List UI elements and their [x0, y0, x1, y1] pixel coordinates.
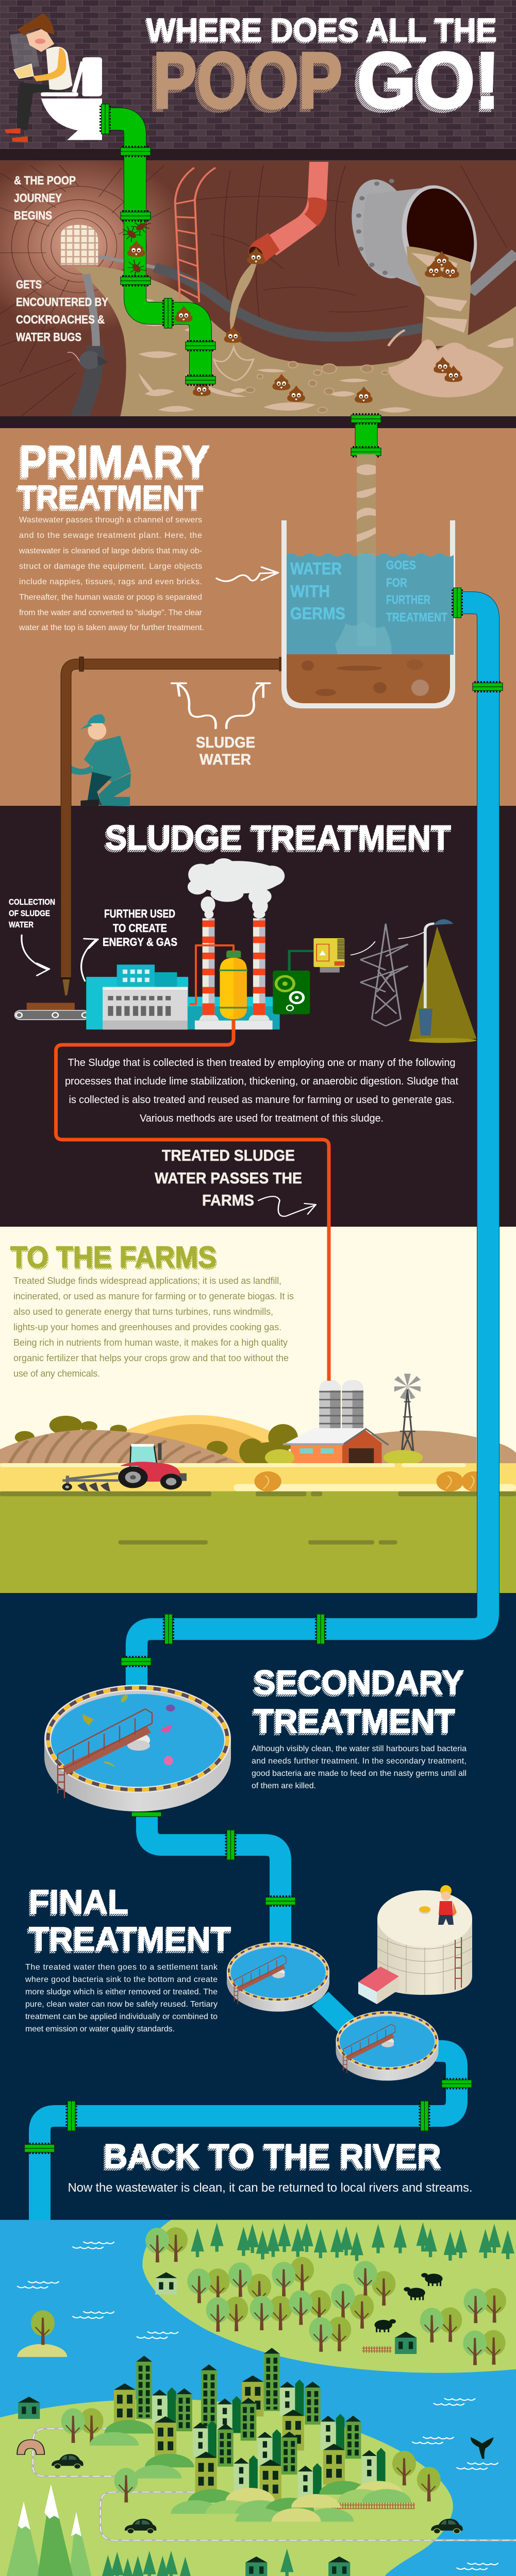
cockroaches and poop in pipe — [119, 216, 193, 322]
tank caption: goes for further treatment — [386, 558, 447, 624]
sewage waterfall — [406, 246, 471, 346]
heading: final treatment: FINAL — [29, 1883, 128, 1921]
chimneys — [195, 918, 273, 1029]
ground — [0, 1463, 516, 1593]
tank caption: water with germs: WATER — [290, 559, 342, 578]
caption: further used to create energy and gas: FURTHER USED — [104, 907, 175, 920]
windmill — [394, 1374, 421, 1454]
north bank — [142, 2220, 516, 2373]
yellow gas tank — [219, 951, 247, 1019]
front bushes — [265, 1449, 423, 1466]
caption: treated sludge water passes the farms: TREATED SLUDGE — [162, 1146, 295, 1164]
south bank — [0, 2399, 453, 2576]
cockroaches caption: COCKROACHES & — [16, 313, 105, 326]
caption: treated sludge water passes the farms: FARMS — [202, 1191, 254, 1209]
farms body text: use of any chemicals. — [13, 1368, 100, 1379]
heading: primary treatment: TREATMENT — [16, 481, 203, 518]
farms body text: also used to generate energy that turns turbines, runs windmills, — [13, 1307, 273, 1317]
settlement tank two — [336, 2011, 439, 2081]
tunnel grate window — [61, 225, 98, 265]
heading: final treatment: TREATMENT — [29, 1920, 231, 1958]
man on toilet with tablet — [5, 13, 102, 142]
power pylon — [351, 924, 425, 1026]
connecting pipe: green toilet outlet — [101, 104, 215, 385]
pine forest — [102, 2223, 514, 2576]
final body text — [25, 1963, 218, 2033]
farms body text: Treated Sludge finds widespread applications; it is used as landfill, — [13, 1276, 281, 1286]
title word: poop: POOP — [153, 36, 342, 125]
primary body text: struct or damage the equipment. Large objects — [19, 562, 202, 571]
title word: poop: POOP — [148, 40, 340, 128]
secondary body text: Although visibly clean, the water still harbours bad bacteria — [252, 1744, 467, 1753]
final body text: pure, clean water can now be safely reused. Tertiary — [25, 2000, 218, 2009]
farms body text: incinerated, or used as manure for farming or to generate biogas. It is — [13, 1291, 294, 1301]
tractor and plough — [62, 1443, 187, 1491]
journey caption — [14, 174, 76, 222]
grey outfall pipe — [343, 175, 485, 293]
title line: where does all the: WHERE DOES ALL THE — [146, 11, 497, 48]
heading: secondary treatment: SECONDARY — [252, 1665, 463, 1703]
tank caption: goes for further treatment: FOR — [386, 576, 407, 590]
back hills and bushes — [15, 1415, 516, 1466]
caption: further used to create energy and gas: ENERGY & GAS — [103, 936, 177, 948]
farms body text — [13, 1276, 294, 1379]
journey caption: JOURNEY — [14, 191, 62, 205]
heading: secondary treatment: TREATMENT — [254, 1702, 455, 1740]
heading: secondary treatment: SECONDARY — [254, 1663, 464, 1701]
primary body text: and to the sewage treatment plant. Here, the — [19, 531, 202, 540]
settling tank with water and sludge — [281, 520, 455, 708]
arrow: energy — [81, 939, 98, 981]
title line: where does all the: WHERE DOES ALL THE — [145, 13, 496, 50]
sludge body text — [65, 1057, 458, 1124]
arrow: collection — [22, 935, 49, 975]
primary body text — [19, 516, 204, 632]
cockroaches caption: WATER BUGS — [16, 330, 81, 344]
island with tree — [17, 2310, 67, 2357]
heading: secondary treatment: TREATMENT — [252, 1704, 454, 1742]
final body text: where good bacteria sink to the bottom and create — [25, 1975, 218, 1984]
round trees — [61, 2227, 506, 2502]
mountains — [3, 2484, 95, 2576]
fences — [331, 2346, 415, 2509]
settlement tank one — [227, 1942, 329, 2012]
tank caption: water with germs: WITH — [290, 582, 330, 601]
primary body text: Thereafter, the human waste or poop is separated — [19, 593, 202, 602]
farms body text: lights-up your homes and greenhouses and provides cooking gas. — [13, 1322, 281, 1332]
houses — [18, 2272, 417, 2576]
ladder — [175, 167, 215, 302]
arrow: to tank — [217, 567, 278, 581]
title word: go!: GO! — [357, 36, 500, 125]
control panel — [313, 938, 344, 973]
heading: primary treatment — [16, 436, 210, 518]
orange treated sludge line — [56, 945, 329, 1381]
heading: sludge treatment: SLUDGE TREATMENT — [104, 820, 451, 859]
sludge water caption: WATER — [199, 751, 251, 768]
conveyor — [15, 979, 89, 1020]
barn — [283, 1428, 388, 1463]
green gear box — [273, 951, 313, 1014]
secondary body text — [252, 1744, 467, 1790]
road bridge over water — [33, 2429, 516, 2540]
germs in tank — [82, 1693, 175, 1768]
primary body text: water at the top is taken away for further treatment. — [19, 623, 204, 632]
caption: collection of sludge water — [9, 898, 55, 929]
heading: primary treatment: TREATMENT — [18, 479, 203, 516]
heading: sludge treatment: SLUDGE TREATMENT — [105, 818, 451, 857]
tank caption: water with germs — [290, 559, 345, 623]
secondary body text: and needs further treatment. In the secondary treatment, — [252, 1757, 467, 1766]
cockroaches caption: ENCOUNTERED BY — [16, 295, 108, 309]
sludge water caption — [196, 734, 255, 768]
final body text: treatment can be applied individually or combined to — [25, 2012, 218, 2021]
panel: primary treatment — [0, 428, 516, 806]
connecting pipe: green into primary tank — [351, 414, 381, 456]
panel: navy treatment section — [0, 1593, 516, 2221]
grey conduit — [99, 257, 155, 267]
journey caption: BEGINS — [14, 209, 52, 222]
tank caption: water with germs: GERMS — [290, 604, 345, 623]
arrows: sludge water — [172, 683, 270, 728]
hay bales — [254, 1471, 486, 1492]
sludge body text: The Sludge that is collected is then treated by employing one or many of the following — [68, 1057, 456, 1069]
silos — [319, 1380, 363, 1429]
heading: primary treatment: PRIMARY — [18, 438, 209, 489]
sewage floor — [74, 266, 516, 417]
final body text: meet emission or water quality standards. — [25, 2025, 175, 2033]
caption: further used to create energy and gas — [103, 907, 177, 948]
sludge body text: processes that include lime stabilization, thickening, or anaerobic digestion. Sludge that — [65, 1076, 458, 1087]
primary body text: from the water and converted to “sludge”. The clear — [19, 608, 203, 617]
toilet — [41, 57, 102, 140]
sludge water caption: SLUDGE — [196, 734, 255, 751]
secondary body text: of them are killed. — [252, 1782, 316, 1790]
secondary body text: good bacteria are made to feed on the nasty germs until all — [252, 1769, 467, 1778]
sludge body text: Various methods are used for treatment of this sludge. — [140, 1113, 384, 1124]
panel: river and town map — [0, 2220, 516, 2576]
panel: to the farms — [0, 1227, 516, 1593]
panel: brick wall header — [0, 0, 516, 160]
primary body text: Wastewater passes through a channel of sewers — [19, 516, 202, 524]
salmon drain pipe — [246, 162, 328, 264]
engineer with hard hat — [438, 1885, 457, 1925]
treated sludge arrow — [258, 1196, 316, 1216]
title word: go!: GO! — [353, 40, 498, 128]
river body text: Now the wastewater is clean, it can be returned to local rivers and streams. — [68, 2181, 472, 2195]
brown sludge pipe — [60, 657, 281, 979]
splash — [388, 340, 504, 397]
tunnel — [17, 2439, 44, 2454]
blue clean water pipes — [25, 588, 503, 2220]
caption: collection of sludge water: WATER — [9, 921, 34, 929]
heading: back to the river: BACK TO THE RIVER — [102, 2139, 441, 2178]
tank caption: goes for further treatment: TREATMENT — [386, 611, 447, 624]
green hills around town — [90, 2420, 411, 2576]
heading: primary treatment: PRIMARY — [19, 436, 210, 487]
farms body text: organic fertilizer that helps your crops grow and that too without the — [13, 1353, 289, 1363]
maintenance worker kneeling — [72, 715, 131, 806]
secondary aeration tank — [44, 1685, 231, 1817]
sewage drip from salmon pipe — [230, 263, 257, 335]
heading: to the farms: TO THE FARMS — [10, 1241, 217, 1274]
panel: underground sewer — [0, 160, 516, 428]
factory building — [86, 964, 280, 1029]
plowed hill — [0, 1430, 240, 1463]
whale tail — [471, 2437, 494, 2459]
sewage stream into tank — [357, 454, 376, 554]
cockroaches caption: GETS — [16, 278, 42, 291]
farms body text: Being rich in nutrients from human waste, it makes for a high quality — [13, 1337, 288, 1348]
final treatment storage tank — [358, 1885, 472, 2004]
panel: sludge treatment — [0, 806, 516, 1227]
heading: final treatment — [27, 1883, 231, 1960]
tank caption: goes for further treatment: FURTHER — [386, 593, 430, 607]
city buildings — [114, 2348, 386, 2500]
heading: to the farms: TO THE FARMS — [11, 1242, 218, 1276]
smoke cloud — [188, 858, 285, 919]
heading: back to the river: BACK TO THE RIVER — [104, 2137, 441, 2176]
caption: treated sludge water passes the farms: WATER PASSES THE — [155, 1169, 302, 1187]
heading: final treatment: TREATMENT — [27, 1922, 230, 1960]
pump house — [358, 1967, 399, 2004]
final body text: more sludge which is either removed or treated. The — [25, 1988, 218, 1996]
primary body text: wastewater is cleaned of large debris that may ob- — [19, 547, 202, 555]
heading: secondary treatment — [252, 1663, 464, 1742]
caption: further used to create energy and gas: TO CREATE — [113, 922, 167, 935]
sludge body text: is collected is also treated and reused as manure for farming or used to generate gas. — [69, 1094, 455, 1106]
rat — [68, 351, 109, 369]
street lamp — [409, 919, 476, 1043]
cockroaches caption — [16, 278, 108, 344]
water waves — [17, 2242, 498, 2570]
caption: collection of sludge water: OF SLUDGE — [9, 909, 50, 918]
sheep — [374, 2273, 443, 2332]
tank caption: goes for further treatment: GOES — [386, 558, 416, 572]
journey caption: & THE POOP — [14, 174, 76, 187]
primary body text: include nappies, tissues, rags and even bricks. — [19, 578, 202, 586]
final body text: The treated water then goes to a settlement tank — [25, 1963, 218, 1972]
heading: final treatment: FINAL — [27, 1885, 128, 1923]
cars — [52, 2454, 463, 2534]
caption: treated sludge water passes the farms — [155, 1146, 302, 1209]
poop characters — [193, 247, 462, 403]
caption: collection of sludge water: COLLECTION — [9, 898, 55, 907]
